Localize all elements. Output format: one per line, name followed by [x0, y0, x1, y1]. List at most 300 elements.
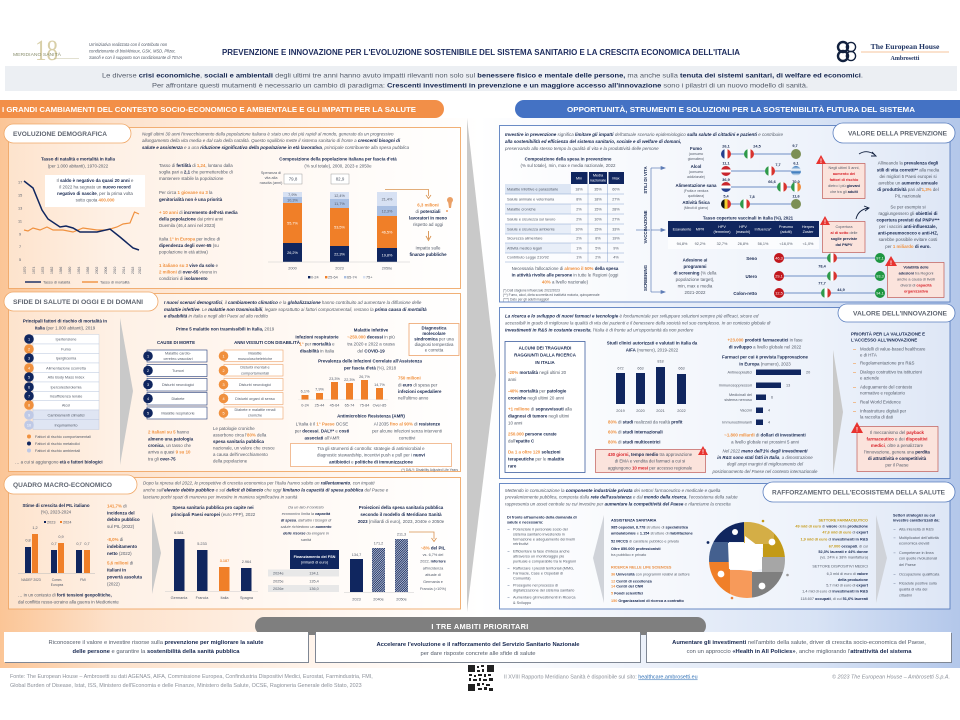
callout: payback: di attrattività e competitività [868, 456, 927, 461]
list: cause di morte: Tumori [172, 369, 184, 373]
table: coperture vaccinali: Zoster [803, 230, 814, 234]
intro text: malattie infettive. Le malattie non trasmissibili, legate soprattutto ai fattori comportamentali, restano la prima causa di mortalità [164, 307, 427, 312]
table: coperture vaccinali: Esavalente [673, 228, 691, 232]
panel: valore della prevenzione [500, 123, 955, 302]
dumbbell chart: screening: 2021-2022 [684, 290, 706, 295]
panel: ambito 1: delle persone e garantire la sostenibilità della sanità pubblica [73, 649, 240, 655]
stacked bar chart: popolazione per età: (% sul totale), 2000, 2023 e 2050e [304, 164, 372, 168]
text: settori industriali: 67.000 occupati, di cui [829, 544, 868, 548]
list: a fronte della domanda: formazione e adeguamento dei livelli [513, 538, 575, 542]
dumbbell chart: stili di vita: 7,8 [749, 195, 755, 199]
bar chart: studi clinici: 818 [657, 360, 664, 364]
list: cause di morte: Disturbi neurologici [162, 383, 194, 387]
table: composizione spesa prevenzione: (% sul totale), min, max e media nazionale, 2022 [521, 163, 616, 168]
list: priorità: e di HTA [860, 352, 877, 358]
table: coperture vaccinali: 94,8% [677, 242, 688, 246]
text: allineamento stili di vita: stili di vita corretti** alla media [877, 168, 940, 172]
text: obiettivi copertura: sarebbe possibile evitare costi [879, 237, 937, 242]
line chart: natalità e mortalità: 1994 [77, 266, 81, 274]
table: composizione spesa prevenzione: 15% [594, 208, 602, 212]
table: composizione spesa prevenzione: 10% [575, 228, 583, 232]
bar chart: infezioni correlate assistenza: 45-64 [330, 404, 339, 408]
line chart: natalità e mortalità: 17 [18, 180, 22, 184]
table: composizione spesa prevenzione: 10% [594, 218, 602, 222]
callout: payback: ! [856, 428, 858, 434]
table: composizione spesa prevenzione: Malattie infettive e parassitarie [507, 188, 558, 192]
text: investimenti globali: Nel 2022 meno dell'1% degli investimenti [722, 448, 808, 454]
text: obiettivi copertura: per i vaccini anti-influenzale, [879, 224, 937, 229]
list: fattori di rischio: 1 [28, 338, 30, 342]
bar chart: infezioni correlate assistenza: 26,7% [359, 375, 370, 379]
donut: ecosistema della salute [705, 520, 789, 600]
pill heading: valore della prevenzione [833, 123, 955, 143]
text: cronicità: arriva a quasi 9 su 10 [148, 450, 191, 454]
text: cronicità: almeno una patologia [148, 436, 194, 442]
list: fattori di rischio: … a cui si aggiungono età e fattori biologici [15, 460, 103, 464]
text: settori industriali: 47,6 mld di euro di export [822, 530, 869, 534]
dumbbell chart: screening: min, max e media [678, 284, 713, 288]
intro text: Negli ultimi 30 anni l'invecchiamento della popolazione italiana è stato uno dei più rapidi al mondo, generato da un progressivo [142, 132, 394, 136]
callout: strumenti di controllo [290, 444, 452, 466]
table: coperture vaccinali: 92,2% [695, 242, 706, 246]
panel: ambito 2 [315, 632, 641, 663]
text: assistenza e ricerca: 12 Centri di eccellenza [611, 580, 653, 584]
stacked bar chart: popolazione per età: 10,3% [287, 198, 298, 202]
list: anni vissuti con disabilità [219, 340, 301, 419]
dumbbell chart: screening [674, 253, 885, 298]
logo: The European House Ambrosetti: The European House [871, 42, 940, 51]
stacked bar chart: popolazione per età: 0-24 [311, 276, 319, 280]
dumbbell chart: stili di vita: 5,4 [723, 194, 730, 198]
list: cause di morte: CAUSE DI MORTE [157, 340, 195, 345]
callout: volatilità adesioni: ! [890, 261, 892, 267]
stacked bar chart: popolazione per età: 2050e [382, 266, 392, 270]
text: debito e povertà: 5,6 milioni di [107, 560, 133, 566]
bar chart: crescita PIL: (%), 2023-2024 [41, 510, 72, 514]
callout: payback: per il Paese [885, 462, 909, 468]
stacked bar chart: popolazione per età: 2000 [288, 266, 297, 270]
intro text [505, 314, 771, 332]
list: priorità: la raccolta di dati [860, 414, 893, 420]
list: settori strategici: Occupazione qualificata [899, 572, 940, 576]
list: a fronte della domanda: salute è necessario: [507, 520, 543, 524]
line chart: natalità e mortalità: 1978 [41, 266, 45, 274]
text: 8% del PIL: vs. 6,7% del [423, 553, 443, 557]
list: cause di morte: 4 [147, 397, 149, 401]
box: traguardi ricerca: RAGGIUNTI DALLA RICERCA [514, 352, 577, 358]
list: a fronte della domanda: Aumentare gli investimenti in Ricerca [513, 596, 576, 600]
line chart: natalità e mortalità: 7 [19, 245, 21, 249]
table: finanziamento FSN: 2024e [273, 572, 284, 576]
table: composizione spesa prevenzione: Salute animale e veterinaria [507, 198, 555, 202]
table: coperture vaccinali: (adulti) [780, 230, 793, 234]
bar chart: crescita PIL [18, 503, 95, 587]
text: settori industriali: 49 mld di euro di valore della produzione [795, 524, 868, 528]
bar chart: studi clinici: 663 [678, 366, 685, 370]
line chart: natalità e mortalità: 1998 [86, 266, 90, 274]
dumbbell chart: screening: 44,9 [837, 288, 845, 292]
box: traguardi ricerca: anni [508, 377, 516, 382]
list: a fronte della domanda: digitalizzazione del sistema sanitario [513, 588, 574, 592]
intro text [164, 300, 427, 318]
box: traguardi ricerca: diagnosi di tumore negli ultimi [508, 414, 569, 418]
stacked bar chart: popolazione per età: 46,5% [382, 230, 393, 234]
list: a fronte della domanda: attraverso un monitoraggio più [513, 554, 564, 558]
text block: dati demografici: dipendenza degli over-65 (su [159, 243, 219, 248]
list: settori strategici: Settori strategici su cui [893, 514, 935, 518]
text: settori industriali [795, 518, 869, 601]
callout: 430 giorni: di EMA e vendita dei farmaci a cui si [615, 458, 685, 464]
report link note: Il XVIII Rapporto Meridiano Sanità è disponibile sul sito: healthcare.ambrosetti.eu [504, 674, 698, 680]
panel: ambito 1 [4, 632, 309, 663]
table: composizione spesa prevenzione: nazionale [590, 178, 606, 182]
bar chart: spesa pro capite: Italia [220, 596, 229, 600]
text block: dati demografici: Tasso di fertilità di 1,24, lontano dalla [159, 163, 233, 168]
text: spesa sanitaria cronicità: assorbono circa l'80% della [213, 432, 267, 438]
list: priorità: e aziende [860, 376, 880, 380]
text block: dati demografici: condizioni di isolamento [159, 276, 208, 281]
label: screening: SCREENING [643, 264, 648, 291]
bar chart: spesa pro capite: Francia [196, 596, 209, 600]
list: priorità: Infrastrutture digitali per [860, 408, 907, 414]
stacked bar chart: popolazione per età: 21,4% [382, 198, 393, 202]
text block: lavoratori in meno: di potenziali [416, 209, 440, 214]
table: finanziamento FSN: 2026e [273, 587, 284, 591]
text: assistenza e ricerca: 5 Fondi scientifici [611, 592, 643, 596]
bar chart: crescita PIL: 2023 [47, 520, 55, 524]
callout: strumenti di controllo: antibiotici e politiche di immunizzazione [329, 460, 413, 464]
text: assistenza e ricerca: RICERCA NELLE LIFE SCIENCES [611, 566, 672, 570]
callout: copertura PNPV: al di sotto delle [830, 231, 858, 235]
table: coperture vaccinali: (femmine) [713, 230, 731, 234]
bar chart: crescita PIL: 0,7 [76, 542, 82, 546]
text: spesa sanitaria cronicità: Le patologie croniche [213, 426, 255, 431]
arrow: curva copertura [856, 206, 869, 219]
text: assistenza e ricerca: 52 IRCCS di carattere pubblico e privato [611, 540, 679, 544]
text block: antimicrobico resistenza: Antimicrobico Resistenza (AMR) [337, 414, 405, 418]
intro band: Per affrontare questi mutamenti è necessario un cambio di paradigma: Crescenti investimenti in prevenzione e un maggiore accesso all'innovazione sono i pilastri di un nuovo modello di sanità. [152, 82, 808, 90]
stacked bar chart: popolazione per età: 22,3% [334, 252, 345, 256]
line chart: natalità e mortalità: 1990 [68, 266, 72, 274]
box: traguardi ricerca: rare [508, 464, 517, 468]
text: settori industriali: 5,7 mld di euro di export [826, 584, 869, 588]
callout: copertura PNPV: dal PNPV [836, 243, 853, 247]
bar chart: crescita PIL: 2024 [63, 520, 71, 524]
bar chart: proiezione spesa: 2050e [396, 598, 407, 602]
box: traguardi ricerca: 250.000 persone curate [508, 432, 557, 436]
text: tensioni geopolitiche: … in un contesto di forti tensioni geopolitiche, [18, 592, 112, 598]
list: cause di morte [143, 340, 207, 419]
table: finanziamento FSN: (miliardi di euro) [301, 560, 329, 564]
list: settori strategici [893, 514, 940, 598]
bar chart: studi clinici: 663 [637, 366, 644, 370]
text: allocazione spesa: in attività rivolte alle persone in tutte le Regioni (oggi [512, 272, 618, 278]
stacked bar chart: popolazione per età: Composizione della popolazione italiana per fascia d'età [279, 156, 397, 162]
table: coperture vaccinali: MPR [696, 228, 704, 232]
stacked bar chart: popolazione per età: 55,7% [287, 222, 298, 226]
list: a fronte della domanda: Efficientare la fase d'intesa anche [513, 550, 570, 554]
dumbbell chart: screening: Utero [746, 274, 757, 279]
central grey arrow [467, 118, 496, 612]
callout: volatilità adesioni: anche a causa di livelli [897, 278, 935, 282]
panel: ambito 1: Riconoscere il valore e investire risorse sulla prevenzione per migliorare la salute [49, 640, 264, 646]
text: investimenti globali: degli ampi margini di miglioramento del [727, 462, 804, 466]
intro band: Le diverse crisi economiche , sociali e ambientali degli ultimi tre anni hanno avuto impatti rilevanti non solo sul benessere fisico e mentale delle persone, ma anche sulla tenuta dei sistemi sanitari, di welfare ed economici . [102, 72, 863, 80]
bar chart: farmaci approvazione: 13 [786, 384, 790, 388]
text: 8% del PIL: Francia (>10%) [420, 587, 447, 591]
callout: volatilità adesioni [885, 256, 944, 298]
text block: dati demografici: Per circa 1 giovane su 3 la [159, 190, 213, 195]
list: fattori di rischio: Fattori di rischio metabolici [35, 442, 80, 446]
list: cause di morte: Malattie cardio- [165, 352, 192, 356]
list: priorità: Dialogo costruttivo tra istituzioni [860, 370, 922, 374]
list: fattori di rischio: Iperglicemia [56, 356, 77, 360]
intro text: Mettendo in comunicazione la componente industriale privata dei settori farmaceutico e medicale e quella [505, 488, 721, 493]
bar chart: crescita PIL: 0,9 [58, 535, 64, 539]
dumbbell chart: screening: Adesione ai [683, 258, 707, 262]
source note [10, 674, 373, 689]
bar chart: farmaci approvazione: Medicinali del [729, 393, 752, 397]
bar chart: crescita PIL: FMI [80, 578, 86, 582]
list: fattori di rischio: Ipercolesterolemia [50, 386, 82, 390]
text: obiettivi copertura: anti-pneumococco e anti-HZ, [878, 230, 938, 236]
table: composizione spesa prevenzione: 19% [612, 236, 620, 240]
callout: fattori di rischio giovani: Negli ultimi 5 anni, [828, 166, 860, 170]
text: allineamento stili di vita: PIL nazionale [895, 194, 922, 198]
text: settori industriali: 52,3% laureati e 44% donne [818, 550, 868, 554]
list: fattori di rischio: 7 [28, 394, 30, 398]
arrow: chevron sinistra [593, 515, 604, 603]
bar chart: proiezione spesa: 2023 [352, 598, 361, 602]
text block: antimicrobico resistenza: associati all'AMR [304, 436, 340, 440]
stacked bar chart: popolazione per età: 7,9% [288, 193, 297, 197]
table: composizione spesa prevenzione: 4% [613, 256, 619, 260]
footnotes: (***) Dato per gli adulti maggiori [503, 298, 549, 302]
arrow: curva produttività [859, 152, 876, 156]
line chart: natalità e mortalità: 1970 [23, 266, 27, 274]
bar chart: farmaci approvazione: 20 [806, 370, 810, 374]
text: spesa sanitaria cronicità: nazionale, un valore che cresce [213, 446, 275, 450]
line chart: natalità e mortalità: Tasso di mortalità [100, 280, 130, 284]
bar chart: spesa pro capite: 2.964 [242, 560, 251, 564]
list: a fronte della domanda: Di fronte all'aumento della domanda di [507, 516, 577, 520]
list: a fronte della domanda: puntuale e comparabile tra le Regioni [513, 560, 576, 564]
text: debito e povertà: -8,0% di [107, 537, 123, 542]
table: composizione spesa prevenzione: 35% [594, 188, 602, 192]
dumbbell chart: screening: programmi [684, 264, 706, 269]
intro text: allungamento della vita media e dal calo della natalità. Questo squilibrio mette il sistema sanitario di fronte a crescenti bisogni di [142, 138, 401, 143]
list: fattori di rischio: 3 [28, 356, 30, 360]
stacked bar chart: popolazione per età: 79,8 [289, 176, 298, 182]
text block: lavoratori in meno: lavoratori in meno [409, 216, 447, 220]
pill heading: valore dell'innovazione [838, 304, 955, 322]
text: assistenza e ricerca: 36 Università con programmi relativi al settore [611, 572, 690, 576]
callout: copertura PNPV: soglie previste [831, 237, 857, 241]
text: tensioni geopolitiche [18, 592, 119, 604]
text: investimenti globali: in R&S sono stati fatti in Italia, a dimostrazione [717, 455, 813, 460]
list: settori strategici: qualità di vita dei [899, 588, 927, 592]
line chart: natalità e mortalità: 2022 [138, 266, 142, 274]
stacked bar chart: popolazione per età [260, 156, 410, 280]
callout: fattori di rischio giovani: aumento dei [833, 172, 855, 176]
callout: strumenti di controllo: Tra gli strumenti di controllo: strategie di antimicrobial e [317, 446, 425, 451]
bar chart: farmaci approvazione: Antineoplastici [728, 370, 752, 374]
table: composizione spesa prevenzione: 5% [595, 246, 601, 250]
text block: dati demografici: della popolazione dai primi anni [159, 216, 223, 222]
dumbbell chart: stili di vita: 11,1 [722, 162, 730, 166]
text: assistenza e ricerca: ASSISTENZA SANITARIA [611, 518, 657, 522]
table: finanziamento FSN: 134,1 [309, 572, 319, 576]
dumbbell chart: stili di vita: 7,7 [775, 163, 781, 167]
table: finanziamento FSN [268, 550, 339, 592]
source note: Global Burden of Disease, Istat, ISS, Ministero dell'Economia e delle Finanze, Ministero della Salute, OCSE, Ragioneria Generale dello Stato, 2023 [10, 683, 362, 689]
panel: valore dell'innovazione [500, 304, 955, 478]
text: tensioni geopolitiche: dal conflitto russo-ucraino alla guerra in Medioriente [18, 600, 119, 604]
text: debito e povertà: indebitamento [107, 544, 137, 549]
text: risorse sanità: Da un lato il contesto [288, 506, 324, 510]
dumbbell chart: screening: popolazione target), [676, 277, 714, 282]
list: cause di morte: 3 [147, 383, 149, 387]
list: a fronte della domanda [507, 516, 577, 605]
bar chart: spesa pro capite: Spagna [240, 596, 254, 600]
box: traguardi ricerca: croniche negli ultimi 20 anni [508, 396, 564, 400]
arrow: chevron macro [152, 512, 161, 594]
text: debito e povertà: incidenza del [107, 510, 135, 516]
list: a fronte della domanda: & Sviluppo [513, 601, 531, 605]
table: composizione spesa prevenzione: Min [576, 176, 582, 180]
text: assistenza e ricerca: Oltre 850.000 professionisti [611, 547, 661, 551]
bar chart: infezioni correlate assistenza: Prevalenza delle Infezioni Correlate all'Assistenza [318, 358, 422, 364]
list: anni vissuti con disabilità: 4 [222, 397, 225, 401]
table: finanziamento FSN: 2025e [273, 580, 284, 584]
text: assistenza e ricerca: 985 ospedali, 8.778 strutture di specialistica [611, 526, 689, 530]
callout: diagnostica molecolare: diagnosi tempestiva [415, 342, 454, 347]
text: malattie infettive: del COVID-19 [357, 348, 385, 354]
callout: copertura PNPV: ! [824, 220, 826, 226]
dumbbell chart: screening: 78,4 [818, 264, 827, 268]
table: composizione spesa prevenzione: Malattie croniche [507, 208, 536, 212]
bar chart: studi clinici [607, 340, 698, 413]
bar chart: farmaci approvazione: 6 [771, 396, 773, 400]
bar chart: farmaci approvazione: Immunosoppressori [719, 384, 752, 388]
list: anni vissuti con disabilità: 1 [222, 354, 225, 358]
list: fattori di rischio: Fattori di rischio ambientali [35, 449, 80, 453]
text block: lavoratori in meno: 6,3 milioni [417, 202, 439, 208]
heading: right section: OPPORTUNITÀ, STRUMENTI E SOLUZIONI PER LA SOSTENIBILITÀ FUTURA DEL SISTEMA [567, 105, 916, 114]
text: settori industriali: SETTORE FARMACEUTICO [818, 518, 868, 522]
bar chart: infezioni correlate assistenza: 25-44 [315, 404, 324, 408]
text: settori industriali: 1,9 mld di euro di investimenti in R&S [800, 538, 868, 542]
table: coperture vaccinali: <16,0% [780, 242, 793, 246]
callout: saldo negativo: Il saldo è negativo da quasi 20 anni e [57, 178, 134, 183]
list: anni vissuti con disabilità: 2 [222, 369, 225, 373]
callout: payback: l'innovazione, genera una perdita [864, 450, 930, 454]
list: settori strategici: con quelle rivoluzionali [899, 556, 937, 560]
text: spesa infezioni ospedaliere: nell'ultimo anno [398, 396, 429, 400]
panel: ambito 2: per dare risposte concrete alle sfide di salute [420, 651, 536, 657]
text: settori industriali: 6,3 mld di euro di valore [827, 572, 868, 576]
text: malattie infettive: ~250.000 decessi in più [347, 334, 395, 340]
list: anni vissuti con disabilità: croniche [248, 414, 262, 418]
bar chart: studi clinici: 2019 [616, 409, 625, 413]
table: composizione spesa prevenzione: 9% [613, 246, 619, 250]
list: cause di morte: 2 [147, 369, 149, 373]
table: composizione spesa prevenzione: Salute e sicurezza sul lavoro [507, 218, 555, 222]
text: spesa sanitaria cronicità: spesa sanitaria pubblica [213, 439, 265, 444]
footnotes: (**) Fumo, alcol, dieta scorretta ed inattività motoria, quinquennale [503, 293, 600, 297]
list: cause di morte: Malattie respiratorie [161, 412, 195, 416]
list: priorità: L'ACCESSO ALL'INNOVAZIONE [851, 338, 917, 342]
dumbbell chart: stili di vita: 11,6 [792, 194, 800, 198]
stacked bar chart: popolazione per età: 19,8% [382, 254, 393, 258]
table: composizione spesa prevenzione: Max [612, 176, 620, 180]
table: composizione spesa prevenzione: 33% [612, 228, 620, 232]
text: debito e povertà [107, 504, 142, 586]
pill heading: rafforzamento [763, 482, 955, 502]
table: coperture vaccinali: 32,7% [717, 242, 728, 246]
list: fattori di rischio: 6 [28, 386, 30, 390]
list: anni vissuti con disabilità: Disturbi neurologici [239, 383, 271, 387]
table: composizione spesa prevenzione: Contributo Legge 210/92 [507, 256, 549, 260]
label: vaccinazione: VACCINAZIONE [643, 210, 648, 244]
text block: antimicrobico resistenza [295, 414, 442, 440]
line chart: natalità e mortalità: 15 [18, 194, 22, 198]
table: composizione spesa prevenzione: 1% [576, 256, 582, 260]
line chart: natalità e mortalità: 5 [19, 258, 21, 262]
bar chart: infezioni correlate assistenza: 6,1% [301, 390, 310, 394]
table: composizione spesa prevenzione: 1% [576, 246, 582, 250]
dumbbell chart: stili di vita: Fumo [690, 146, 702, 151]
bar chart: infezioni correlate assistenza: 23,3% [329, 377, 340, 381]
list: cause di morte: 5 [147, 412, 149, 416]
intro text: salute e assistenza e a una riduzione significativa della popolazione in età lavorativa, principale contribuente alla spesa pubblica [142, 145, 410, 150]
list: fattori di rischio: Insufficienza renale [50, 394, 82, 398]
dumbbell chart: stili di vita: (consumo [689, 152, 703, 156]
text: malattie infettive: tra 2020 e 2022 a causa [347, 342, 395, 346]
line chart: natalità e mortalità: 2018 [131, 266, 135, 274]
dumbbell chart: stili di vita: 36,9 [722, 178, 730, 182]
bar chart: farmaci approvazione: 4 [768, 408, 770, 412]
pill heading: valore della prevenzione: VALORE DELLA PREVENZIONE [848, 130, 948, 138]
list: fattori di rischio [15, 318, 107, 464]
list: fattori di rischio: Alto Body Mass Index [48, 376, 84, 380]
list: settori strategici: Alta intensità di R&S [899, 528, 934, 532]
list: priorità: PRIORITÀ PER LA VALUTAZIONE E [851, 332, 925, 336]
text: 8% del PIL: attuale di [425, 573, 441, 577]
list: settori strategici: Competenze in linea [899, 551, 935, 555]
background gradient band [0, 118, 960, 668]
bar chart: crescita PIL: Stime di crescita del PIL italiano [22, 503, 90, 508]
panel: evoluzione demografica [4, 124, 460, 288]
text: risorse sanità: di spesa, dall'altro i bisogni di [281, 518, 331, 522]
text: spesa infezioni ospedaliere: infezioni ospedaliere [398, 389, 442, 394]
dumbbell chart: stili di vita: 66,6 [768, 180, 776, 184]
logo: The European House Ambrosetti [838, 42, 949, 62]
heading: right section [515, 100, 960, 118]
stacked bar chart: popolazione per età: 53,5% [334, 226, 345, 230]
bar chart: crescita PIL: Europea [51, 583, 63, 587]
text: debito e povertà: sul PIL (2022) [107, 524, 135, 529]
intro text: I nuovi scenari demografici, il cambiamento climatico e la globalizzazione hanno contribuito ad aumentare la diffusione delle [164, 300, 422, 305]
text: investimenti globali: posizionamento del Paese nel contesto internazionale [712, 469, 818, 474]
box: traguardi ricerca: ALCUNI DEI TRAGUARDI [519, 346, 571, 350]
table: coperture vaccinali: 56,1% [758, 242, 769, 246]
list: anni vissuti con disabilità: comportamentali [241, 372, 269, 376]
pill heading: evoluzione demografica [4, 124, 131, 143]
list: anni vissuti con disabilità: 5 [222, 412, 225, 416]
list: fattori di rischio: 5 [28, 376, 30, 380]
stacked bar chart: popolazione per età: Speranza di [261, 171, 281, 175]
